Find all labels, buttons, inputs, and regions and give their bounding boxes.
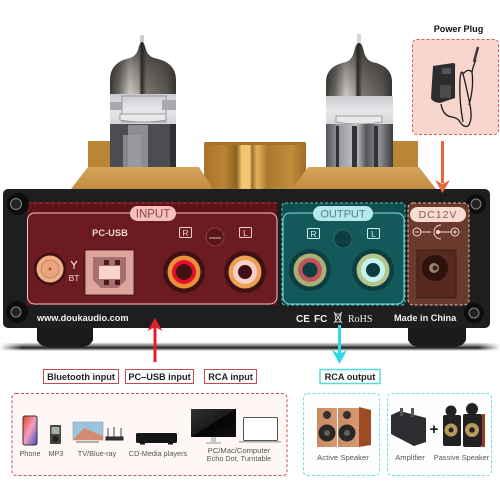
- panel: input: [27, 202, 277, 305]
- certification marks: FC: [314, 314, 327, 325]
- MP3 label: MP3: [48, 449, 64, 458]
- certification marks: CE: [296, 314, 310, 325]
- arrow: power to DC input: [435, 141, 450, 193]
- RCA jack: input left: [224, 251, 266, 293]
- plus sign: +: [430, 421, 439, 438]
- R badge: R: [182, 228, 189, 238]
- input heading: [130, 206, 176, 221]
- icon: phone: [23, 416, 37, 445]
- amplifier rear chassis: [3, 189, 490, 328]
- screw bottom right: [464, 303, 484, 323]
- amplifier right foot: [408, 326, 466, 347]
- icon: amplifier: [391, 408, 426, 446]
- gold right base: [292, 167, 436, 189]
- label: Bluetooth input: Bluetooth input: [47, 372, 115, 382]
- DC heading: DC12V: [419, 209, 457, 221]
- L badge: L: [243, 228, 248, 238]
- panel: amplifier and passive speaker: [388, 394, 492, 476]
- icon: USB-B port: [85, 250, 134, 295]
- input heading: INPUT: [136, 208, 170, 220]
- amplifier left foot: [37, 326, 93, 347]
- label: RCA output: RCA output: [325, 372, 375, 382]
- power plug panel: [412, 40, 498, 134]
- RCA jack: output left: [352, 249, 394, 291]
- icon: polarity symbol: [413, 225, 459, 239]
- icon: power adapter: [431, 47, 478, 126]
- gold collars behind tubes: [88, 141, 418, 167]
- TV label: TV/Blue-ray: [78, 449, 117, 458]
- PC label: PC/Mac/Computer: [208, 446, 271, 455]
- R badge: [180, 228, 192, 238]
- screw between jacks: [206, 228, 224, 246]
- label: PC-USB input: PC–USB input: [128, 372, 191, 382]
- icon: monitor: [191, 409, 236, 444]
- screw between jacks: [334, 230, 352, 248]
- PC-USB label: PC-USB: [92, 228, 128, 238]
- RCA jack: input right: [163, 251, 205, 293]
- certification marks: RoHS: [348, 314, 372, 325]
- output heading: OUTPUT: [320, 208, 366, 220]
- amplifier label: Amplifier: [395, 453, 425, 462]
- left vacuum tube: [110, 35, 176, 167]
- certification marks: [296, 312, 372, 325]
- made in china text: Made in China: [394, 313, 457, 323]
- gold left base: [71, 167, 213, 189]
- label: Bluetooth input: [44, 370, 118, 384]
- arrow: input: [148, 318, 162, 362]
- label: PC-USB input: [126, 370, 194, 384]
- icon: DC jack: [417, 250, 456, 298]
- R badge: R: [310, 229, 317, 239]
- screw top right: [466, 194, 486, 214]
- panel: input sources: [12, 394, 287, 476]
- icon: bluetooth antenna connector: [34, 253, 66, 285]
- icon: router: [106, 427, 123, 440]
- active speaker label: Active Speaker: [317, 453, 369, 462]
- RCA jack: output right: [289, 249, 331, 291]
- panel: DC 12V: [408, 203, 469, 305]
- passive speaker label: Passive Speaker: [434, 453, 490, 462]
- bluetooth label: BT: [69, 273, 79, 283]
- right vacuum tube: [326, 34, 393, 167]
- screw bottom left: [6, 301, 28, 323]
- label: RCA output: [320, 370, 380, 384]
- icon: CD player: [136, 433, 177, 444]
- L badge: [240, 228, 252, 238]
- screw top left: [7, 193, 29, 215]
- panel: output: [282, 203, 405, 305]
- icon: MP3 player: [50, 425, 61, 444]
- table shadow: [0, 342, 500, 352]
- Echo label: Echo Dot, Turntable: [207, 454, 271, 463]
- panel: active speaker: [304, 394, 380, 476]
- label: RCA input: [204, 370, 256, 384]
- website text: www.doukaudio.com: [36, 313, 129, 323]
- power plug label: Power Plug: [434, 24, 483, 34]
- arrow: output: [332, 325, 347, 364]
- icon: active speakers: [317, 407, 371, 447]
- icon: laptop: [239, 418, 281, 442]
- phone label: Phone: [19, 449, 41, 458]
- CD label: CD-Media players: [129, 449, 188, 458]
- icon: passive speakers: [443, 403, 485, 447]
- icon: TV: [73, 422, 103, 442]
- gold center knob: [204, 142, 306, 189]
- bluetooth label: [69, 261, 79, 283]
- L badge: L: [371, 229, 376, 239]
- label: RCA input: RCA input: [208, 372, 253, 382]
